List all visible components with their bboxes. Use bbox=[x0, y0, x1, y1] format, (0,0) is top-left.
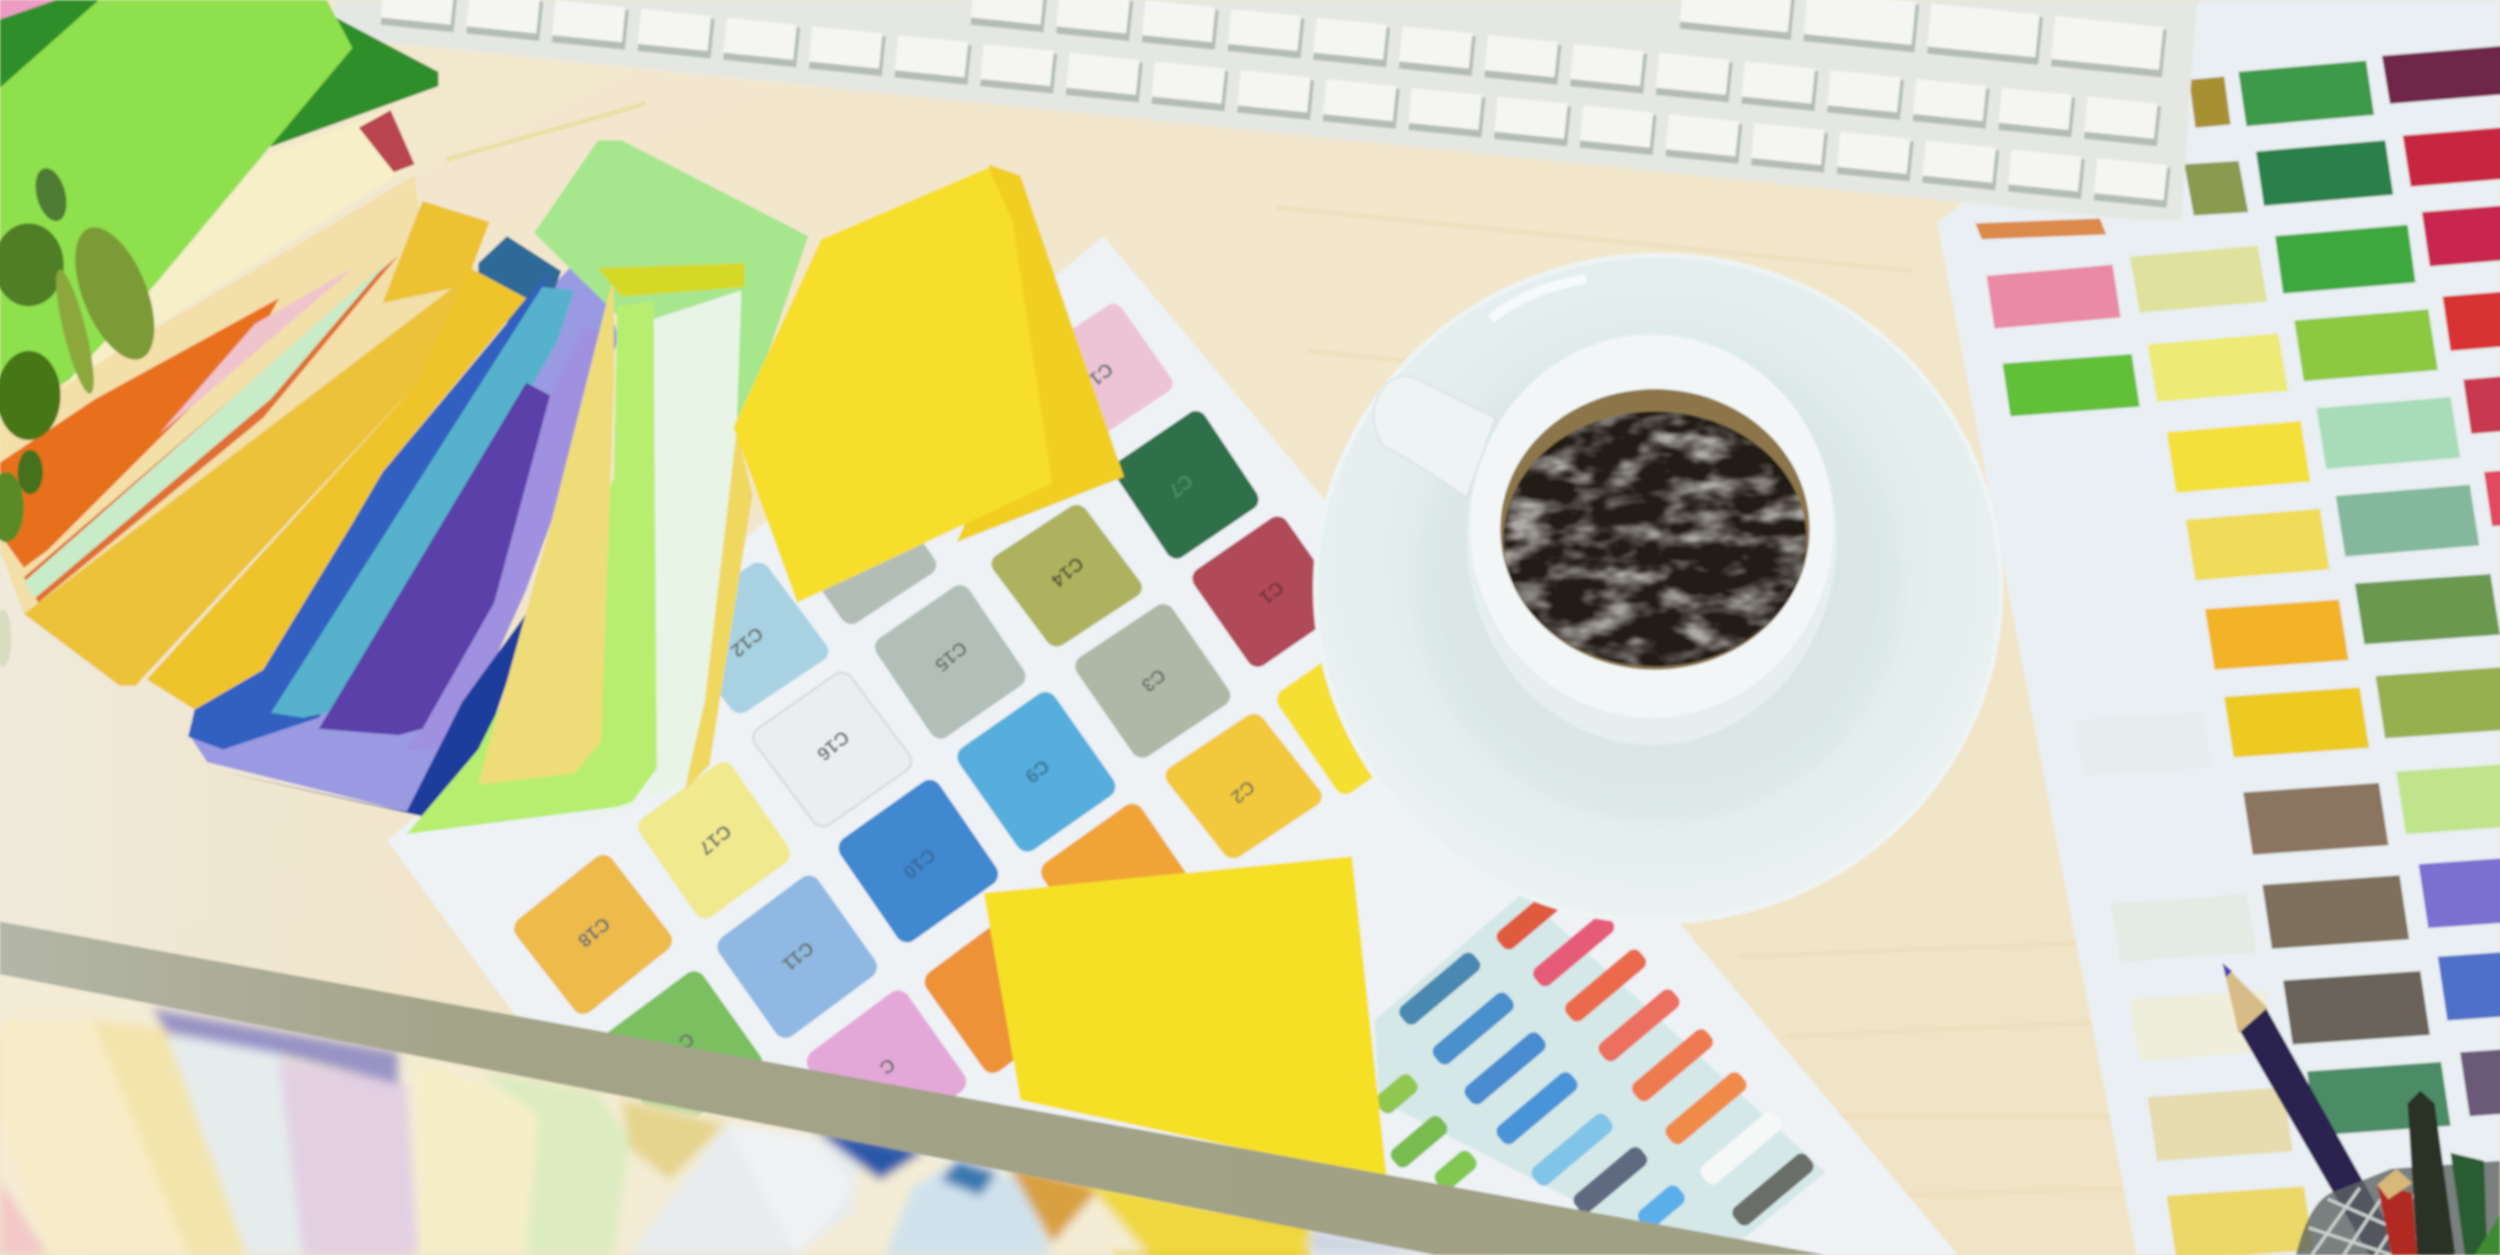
saucer bbox=[1315, 255, 2001, 922]
navy edge bbox=[215, 603, 534, 816]
swatches column 3 bbox=[2382, 45, 2500, 526]
colour tiles with labels: C14 bbox=[1046, 552, 1087, 591]
faint swatches bbox=[2074, 713, 2313, 1255]
reflection under glass edge bbox=[0, 974, 1435, 1255]
colour tiles with labels: C12 bbox=[726, 622, 767, 661]
colour tiles with labels: C bbox=[674, 1028, 698, 1053]
gold tab card bbox=[383, 201, 489, 303]
plant bbox=[0, 165, 171, 667]
cup body bbox=[1467, 333, 1837, 745]
blue header cards bbox=[478, 236, 561, 335]
light purple strip bbox=[407, 327, 619, 749]
colour tiles with labels: C9 bbox=[1021, 755, 1053, 786]
stripe colour table bbox=[1372, 891, 1826, 1244]
yellow green header bbox=[598, 263, 745, 297]
blue card bbox=[188, 271, 550, 749]
colour tiles with labels: C11 bbox=[777, 937, 817, 975]
dark green cards bbox=[0, 0, 438, 147]
colour tiles with labels: C18 bbox=[573, 912, 614, 951]
colour tiles with labels: C3 bbox=[1137, 664, 1169, 696]
keyboard bbox=[335, 0, 2197, 220]
light green card bbox=[0, 0, 352, 391]
lime card bbox=[407, 301, 657, 834]
gold card two bbox=[147, 268, 526, 710]
cup rim bbox=[1470, 335, 1834, 718]
right colour chart sheet bbox=[1937, 0, 2500, 1255]
red tipped cream card bbox=[61, 110, 415, 389]
colour tiles with labels: C bbox=[875, 1053, 899, 1078]
colour tiles with labels: C15 bbox=[930, 636, 971, 675]
mint card bbox=[24, 255, 399, 603]
swatches column 0 bbox=[1975, 219, 2140, 416]
coffee cup and saucer bbox=[1315, 255, 2001, 922]
colour tiles with labels: C10 bbox=[898, 844, 939, 882]
pink card bbox=[159, 268, 354, 434]
pen holder with pens bbox=[2296, 1091, 2500, 1255]
cup handle bbox=[1374, 376, 1496, 498]
colour tiles with labels: C17 bbox=[694, 820, 735, 858]
colour tiles with labels: C2 bbox=[1226, 775, 1258, 807]
pale green card bbox=[534, 140, 808, 431]
gold card large bbox=[24, 274, 470, 686]
colour tiles with labels: C7 bbox=[1164, 469, 1196, 501]
base of warm cards bbox=[0, 175, 470, 614]
fan of paint cards bbox=[0, 0, 808, 834]
folded yellow sticky note bbox=[733, 164, 1124, 603]
coffee bbox=[1499, 407, 1818, 678]
orange card bbox=[0, 298, 279, 568]
teal card bbox=[271, 287, 574, 718]
pale yellow card bbox=[478, 274, 614, 785]
pink corner bbox=[0, 0, 56, 19]
colour tiles with labels: C16 bbox=[812, 726, 853, 764]
colour tiles with labels: C1 bbox=[1084, 358, 1117, 390]
colour tiles with labels bbox=[509, 300, 1438, 1158]
colour tiles with labels: C1 bbox=[1255, 576, 1287, 608]
yellow sliver behind bbox=[686, 431, 753, 789]
deep purple card bbox=[319, 383, 550, 735]
swatches column 2 bbox=[2239, 61, 2500, 1116]
white mint card bbox=[558, 290, 741, 826]
swatches column 1 bbox=[2130, 77, 2451, 1135]
glass edge bar bbox=[0, 922, 1826, 1255]
large yellow sticky note bbox=[984, 856, 1387, 1255]
centre swatch sheet bbox=[387, 236, 1958, 1255]
purple and lavender base bbox=[188, 263, 619, 812]
pencil bbox=[2223, 963, 2404, 1255]
